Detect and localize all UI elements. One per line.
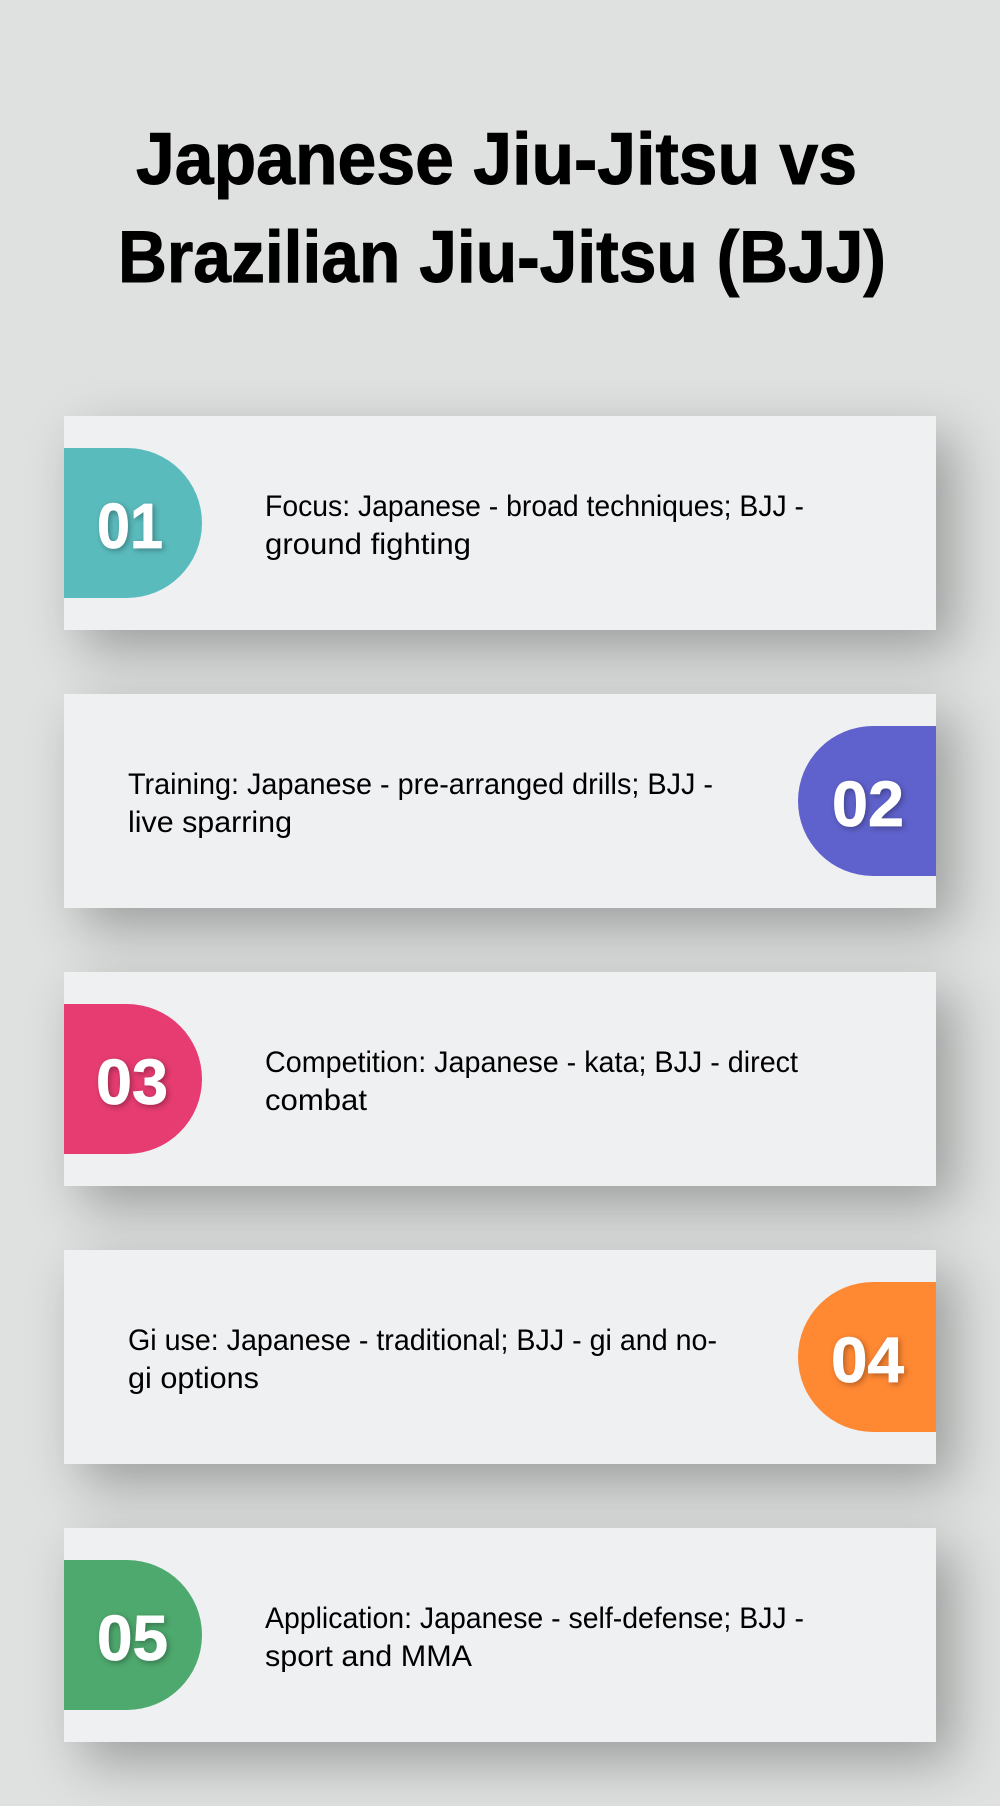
- text: application: Application: Japanese - self-defense; BJJ -: [265, 1602, 804, 1635]
- text: focus: [265, 490, 804, 561]
- badge: 04: [798, 1282, 936, 1432]
- panel: 01 focus: [64, 416, 936, 630]
- panel: 03 competition: [64, 972, 936, 1186]
- text: gi use: gi options: [128, 1362, 259, 1395]
- text: gi use: [128, 1324, 717, 1395]
- number: 03: 03: [96, 1046, 168, 1118]
- panel: 05 application: [64, 1528, 936, 1742]
- title: [118, 119, 886, 298]
- badge: 05: [64, 1560, 202, 1710]
- text: focus: ground fighting: [265, 528, 471, 561]
- text: training: [128, 768, 713, 839]
- text: application: [265, 1602, 804, 1673]
- text: training: Training: Japanese - pre-arranged drills; BJJ -: [128, 768, 713, 801]
- number: 05: 05: [97, 1602, 168, 1674]
- text: application: sport and MMA: [265, 1640, 472, 1673]
- text: gi use: Gi use: Japanese - traditional; BJJ - gi and no-: [128, 1324, 717, 1357]
- panel: 04 gi use: [64, 1250, 936, 1464]
- badge: 01: [64, 448, 202, 598]
- panel: 02 training: [64, 694, 936, 908]
- text: competition: Competition: Japanese - kata; BJJ - direct: [265, 1046, 799, 1079]
- text: focus: Focus: Japanese - broad techniques; BJJ -: [265, 490, 804, 523]
- number: 04: 04: [831, 1324, 904, 1396]
- number: 02: 02: [832, 768, 904, 840]
- badge: 02: [798, 726, 936, 876]
- number: 01: 01: [97, 490, 163, 562]
- title: Brazilian Jiu-Jitsu (BJJ): [118, 217, 886, 298]
- badge: 03: [64, 1004, 202, 1154]
- text: competition: combat: [265, 1084, 368, 1117]
- title: Japanese Jiu-Jitsu vs: [136, 119, 857, 200]
- text: competition: [265, 1046, 799, 1117]
- text: training: live sparring: [128, 806, 292, 839]
